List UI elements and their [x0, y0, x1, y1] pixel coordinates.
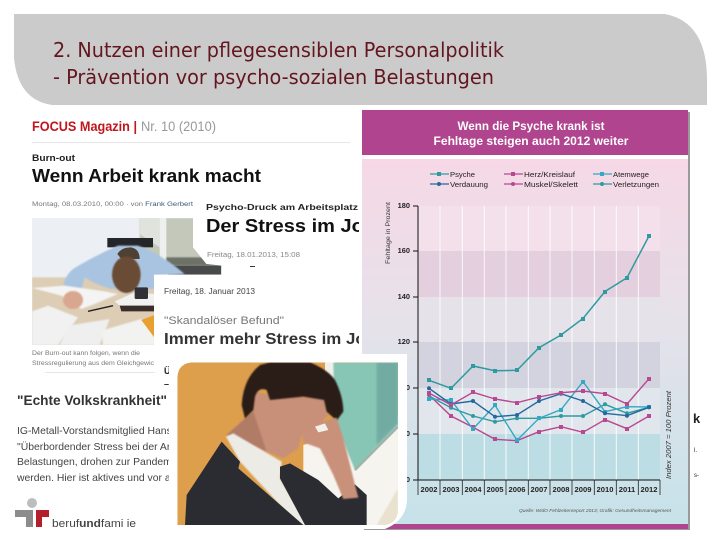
- cut-off fragment: [164, 366, 169, 385]
- x axis years: 2005: [487, 485, 504, 494]
- fragments right of chart: k: [693, 411, 701, 426]
- article: Echte Volkskrankheit: "Echte Volkskrankheit": [17, 393, 167, 408]
- x axis years: 2003: [443, 485, 459, 494]
- article: Immer mehr Stress: [164, 288, 359, 344]
- photo frame: white rounded border: [169, 354, 407, 529]
- x axis years: 2012: [641, 485, 657, 494]
- article: Focus magazine header: [32, 119, 350, 208]
- photo caption: [32, 350, 155, 367]
- index note: Index 2007 = 100 Prozent: [666, 390, 673, 479]
- logo: berufundfamilie: berufundfami ie: [52, 518, 136, 530]
- cut-off fragment: Ü: [164, 366, 170, 376]
- cut-off fragment: –: [164, 379, 169, 389]
- logo: berufundfamilie: [15, 498, 136, 530]
- article: Immer mehr Stress: "Skandalöser Befund": [164, 315, 284, 327]
- y axis labels: [398, 201, 410, 484]
- series: Muskel/Skelett: [427, 393, 651, 443]
- y axis labels: 140: [398, 292, 410, 301]
- x axis years: 2009: [575, 485, 591, 494]
- x axis years: 2006: [509, 485, 525, 494]
- line chart: [385, 201, 660, 495]
- date line: Freitag, 18.01.2013, 15:08: [207, 250, 300, 259]
- y axis labels: 100: [398, 383, 410, 392]
- chart header band: [362, 110, 688, 155]
- y axis labels: 80: [402, 429, 410, 438]
- article: Echte Volkskrankheit: werden. Hier ist aktives und vor allem: [16, 473, 190, 484]
- article: Focus magazine header: Wenn Arbeit krank macht: [32, 165, 261, 186]
- x axis years: 2002: [421, 485, 437, 494]
- title banner: [14, 14, 707, 105]
- panel: chart infographic: [362, 110, 690, 530]
- series: Psyche: [427, 234, 651, 390]
- x axis years: 2010: [597, 485, 613, 494]
- photo: stressed woman: [177, 362, 398, 525]
- fragments right of chart: l.: [694, 448, 697, 454]
- y axis labels: 180: [398, 201, 410, 210]
- series: Verdauung: [427, 386, 651, 419]
- white panel over photo: [154, 266, 359, 355]
- axis title: Fehltage in Prozent: [385, 202, 392, 264]
- article: Der Stress im Job: Psycho-Druck am Arbeitsplatz: [206, 202, 358, 212]
- title text: [53, 38, 504, 89]
- series: Atemwege: [427, 380, 651, 442]
- article: Focus magazine header: Nr. 10 (2010): [141, 119, 216, 134]
- article: Der Stress im Job: Der Stress im Job: [206, 216, 376, 236]
- y axis labels: 60: [402, 475, 410, 484]
- photo: man asleep on desk: [32, 218, 223, 345]
- legend: [430, 170, 659, 189]
- chart title: Wenn die Psyche krank ist: [458, 119, 605, 133]
- x axis years: 2004: [465, 485, 482, 494]
- legend: Muskel/Skelett: [524, 180, 578, 189]
- x axis years: [421, 485, 657, 494]
- series: Herz/Kreislauf: [427, 377, 651, 407]
- article: Focus magazine header: Montag, 08.03.2010, 00:00 · von Frank Gerbert: [32, 201, 193, 208]
- legend: Verdauung: [450, 180, 488, 189]
- legend: Herz/Kreislauf: [524, 170, 576, 179]
- article: Immer mehr Stress: Immer mehr Stress im Job: [164, 331, 376, 348]
- photo caption: Stressregulierung aus dem Gleichgewic: [32, 360, 155, 367]
- chart title: [434, 119, 629, 148]
- legend: Verletzungen: [613, 180, 659, 189]
- article: Focus magazine header: Burn-out: [32, 153, 75, 163]
- article: Echte Volkskrankheit: IG-Metall-Vorstandsmitglied Hans: [17, 426, 172, 437]
- source note: Quelle: WidO Fehlzeitenreport 2013; Grafik: Gesundheitsmanagement: [519, 508, 672, 514]
- article: Echte Volkskrankheit: Belastungen, drohen zur Pandemie: [17, 457, 180, 468]
- chart title: Fehltage steigen auch 2012 weiter: [434, 134, 629, 148]
- legend: Psyche: [450, 170, 475, 179]
- title text: - Prävention vor psycho-sozialen Belastungen: [53, 65, 494, 89]
- article: Focus magazine header: FOCUS Magazin |: [32, 119, 137, 134]
- fragments right of chart: s-: [694, 473, 699, 479]
- y axis labels: 160: [398, 246, 410, 255]
- series: Verletzungen: [429, 396, 651, 424]
- article: Immer mehr Stress: Freitag, 18. Januar 2013: [164, 287, 255, 296]
- x axis years: 2008: [553, 485, 569, 494]
- legend: Atemwege: [613, 170, 649, 179]
- x axis years: 2011: [619, 485, 636, 494]
- article: Echte Volkskrankheit: "Überbordender Stress bei der Arbeit: [17, 441, 187, 453]
- article: Der Stress im Job: [206, 204, 359, 232]
- fragments right of chart: [693, 411, 701, 479]
- title text: 2. Nutzen einer pflegesensiblen Personalpolitik: [53, 38, 504, 62]
- y axis labels: 120: [398, 337, 410, 346]
- bottom bar: [362, 524, 688, 529]
- photo caption: Der Burn-out kann folgen, wenn die: [32, 350, 140, 357]
- x axis years: 2007: [531, 485, 547, 494]
- article: Echte Volkskrankheit: [17, 395, 169, 481]
